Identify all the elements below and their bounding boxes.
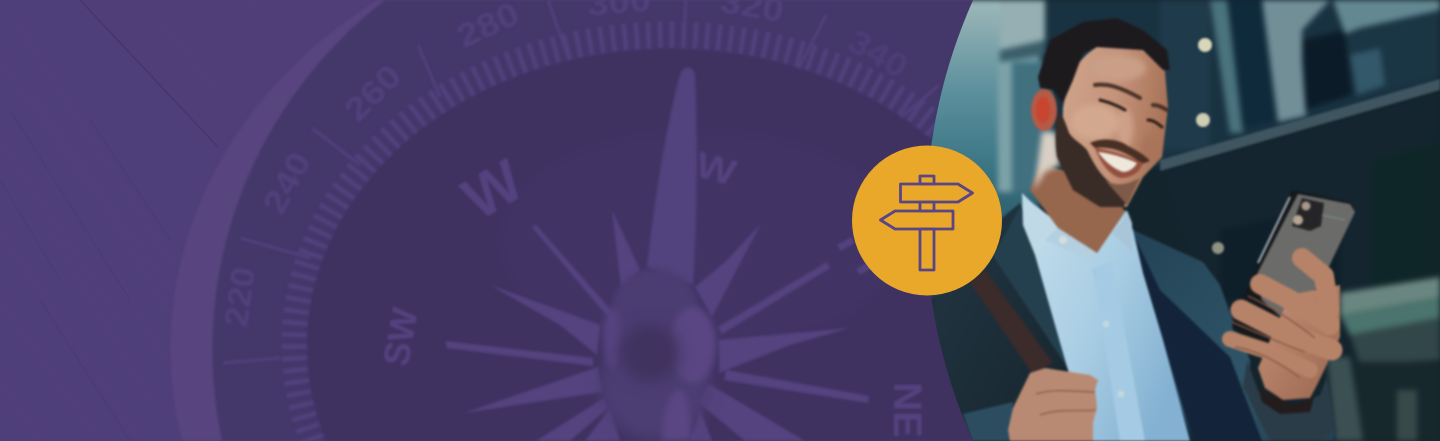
compass cardinal letters: W (691, 144, 741, 193)
face (1062, 47, 1168, 207)
canopy (1340, 277, 1440, 315)
compass cardinal letters (375, 144, 929, 438)
building pillars (1210, 0, 1243, 133)
phone (1232, 190, 1355, 345)
panel: purple compass background (0, 0, 1045, 441)
chin shadow (1105, 178, 1140, 205)
upper glass facade (1040, 0, 1440, 170)
collar (1022, 193, 1133, 262)
phone highlight (1258, 197, 1290, 263)
shirt placket (1093, 262, 1145, 441)
strap (970, 270, 1053, 373)
facade band (1160, 79, 1440, 171)
compass bezel (170, 0, 1000, 441)
compass dial (212, 0, 1000, 441)
jacket: right side (1133, 230, 1337, 441)
mouth (1090, 140, 1150, 178)
compass degree numbers (217, 0, 914, 329)
neck highlight (1034, 132, 1060, 190)
face shading (1074, 56, 1147, 150)
cuff and watch (1243, 360, 1335, 441)
hair (1038, 18, 1170, 103)
compass cardinal letters: NE (885, 382, 929, 438)
jacket: dark right lapel (1133, 233, 1262, 441)
badge: signpost icon circle (852, 146, 1002, 296)
compass degree numbers: 340 (842, 22, 914, 85)
compass tick marks (223, 0, 1045, 441)
compass cardinal letters: SW (375, 305, 426, 369)
neck (1030, 165, 1125, 253)
jacket: left lapel (993, 207, 1067, 367)
compass cardinal letters: W (451, 146, 534, 233)
jacket: left side (932, 202, 1040, 414)
ear (1031, 89, 1057, 131)
wood surface (0, 0, 1000, 441)
fist (1008, 368, 1098, 441)
compass inner disc (307, 49, 1033, 441)
teal left wing (920, 0, 1040, 300)
businessman (925, 18, 1355, 441)
compass degree numbers: 240 (255, 146, 318, 220)
beard (1056, 113, 1130, 207)
compass degree numbers: 260 (337, 57, 408, 128)
shirt (1022, 195, 1190, 441)
main needle (647, 68, 697, 285)
jacket: lower sleeve (963, 402, 1013, 441)
compass hub (600, 269, 716, 441)
lower dark facade (1160, 88, 1440, 300)
hand (1230, 258, 1340, 400)
panel: photo of businessman with phone (920, 0, 1440, 441)
icon: signpost (880, 176, 972, 270)
compass rose (445, 68, 869, 441)
eyes and brows (1095, 85, 1167, 127)
compass degree numbers: 220 (217, 265, 262, 329)
office building background (920, 0, 1440, 441)
